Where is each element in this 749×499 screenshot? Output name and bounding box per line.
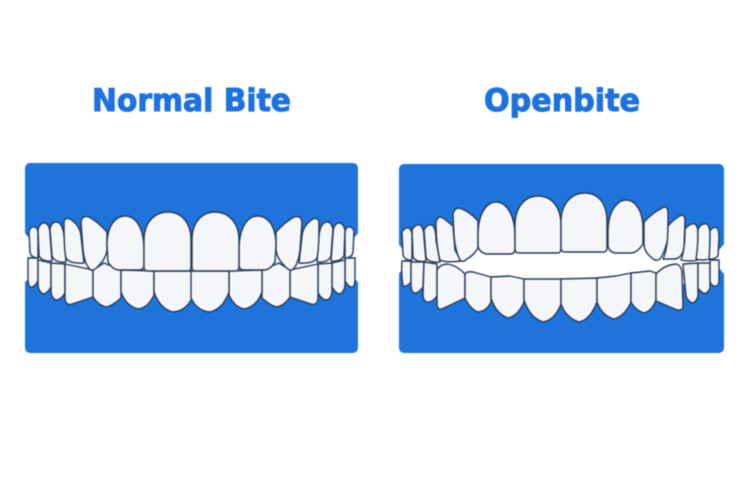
lower teeth: normal bite [28, 258, 355, 312]
title: Openbite: Openbite [484, 83, 640, 119]
upper teeth: normal bite [29, 212, 354, 271]
open gap between teeth [403, 240, 719, 284]
white backing behind normal teeth [29, 238, 354, 282]
upper teeth: openbite [402, 193, 719, 262]
panel: openbite [398, 164, 725, 353]
title: Normal Bite: Normal Bite [92, 83, 291, 119]
lower teeth: openbite [402, 260, 719, 322]
panel: normal bite [24, 163, 359, 353]
